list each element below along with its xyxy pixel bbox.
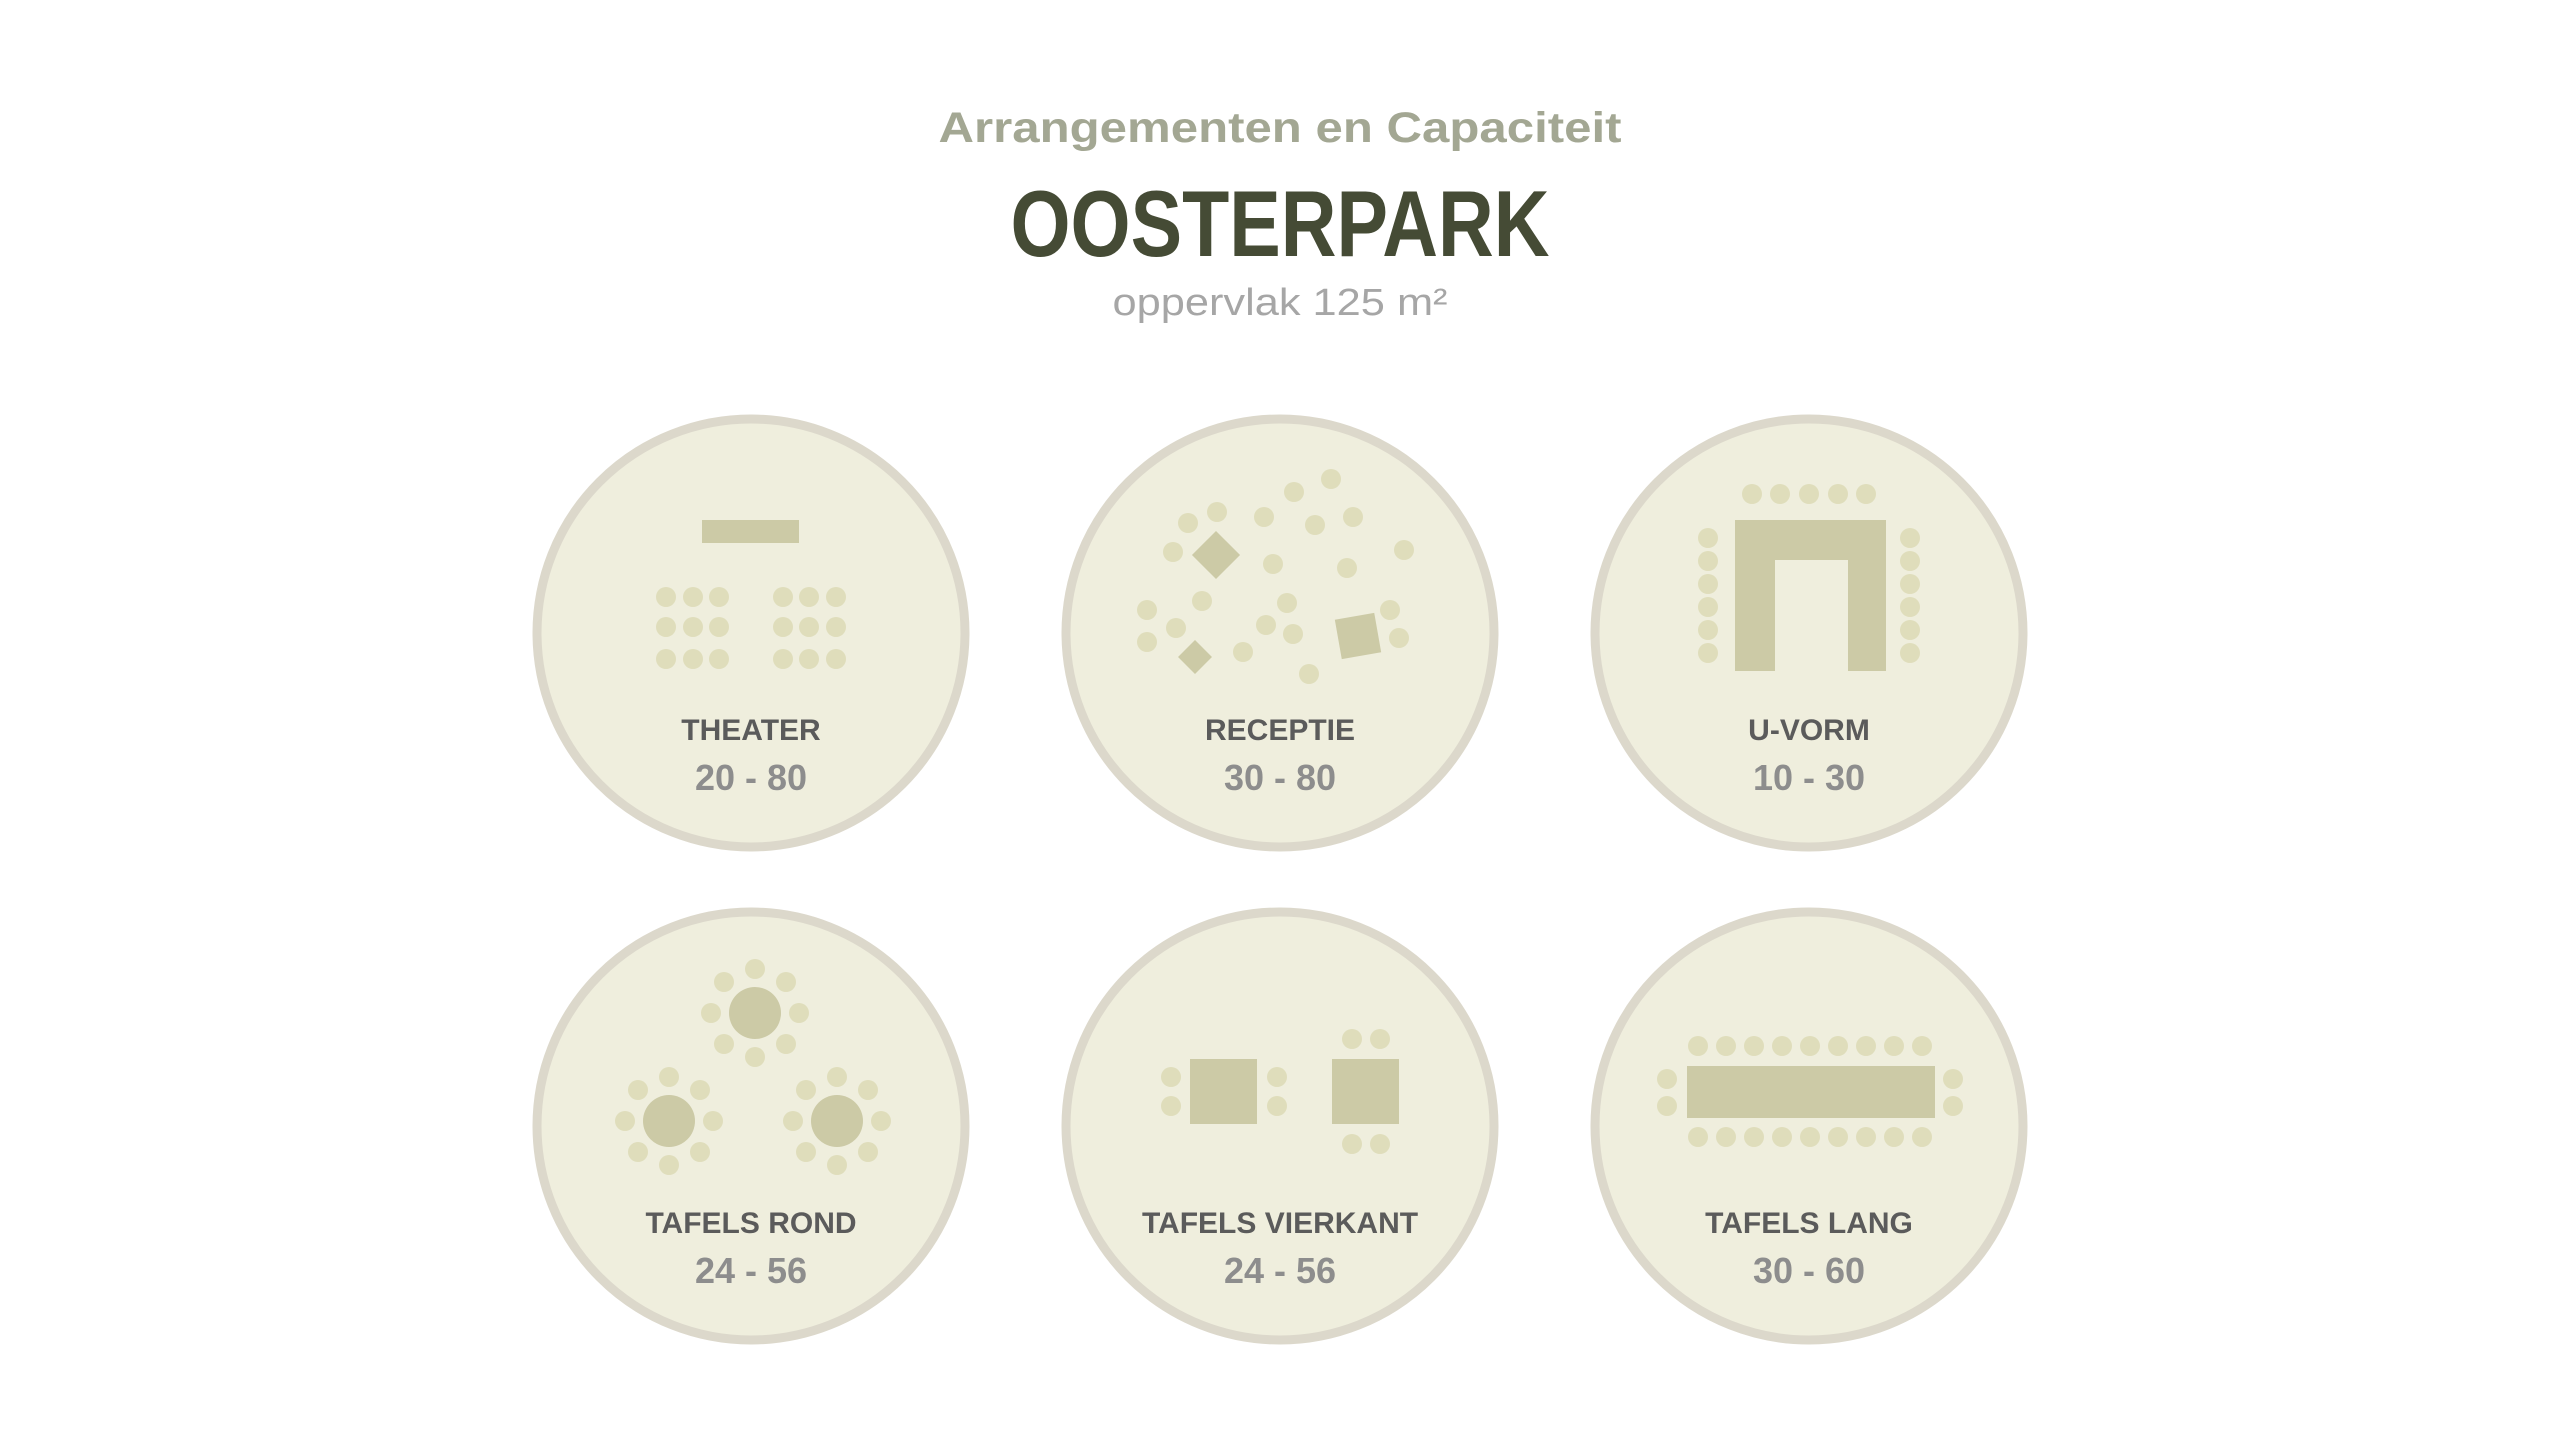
icon: square tables <box>1161 1029 1399 1154</box>
panel: theater <box>537 419 965 847</box>
icon: round tables <box>615 959 891 1175</box>
icon: theater layout <box>656 520 846 669</box>
label: tafels vierkant: TAFELS VIERKANT <box>1142 1207 1418 1240</box>
label: receptie: RECEPTIE <box>1205 714 1355 747</box>
panel: tafels vierkant <box>1066 912 1494 1340</box>
panel: receptie <box>1066 419 1494 847</box>
label: tafels lang: TAFELS LANG <box>1705 1207 1913 1240</box>
capacity: theater: 20 - 80 <box>695 757 807 798</box>
label: theater: THEATER <box>681 714 821 747</box>
capacity: u-vorm: 10 - 30 <box>1753 757 1865 798</box>
panel: tafels rond <box>537 912 965 1340</box>
title: OOSTERPARK <box>1010 171 1550 276</box>
area text: oppervlak 125 m² <box>1112 282 1448 324</box>
icon: receptie layout <box>1137 469 1414 684</box>
subtitle: Arrangementen en Capaciteit <box>938 104 1622 152</box>
panel: u-vorm <box>1595 419 2023 847</box>
capacity: tafels rond: 24 - 56 <box>695 1250 807 1291</box>
capacity: tafels lang: 30 - 60 <box>1753 1250 1865 1291</box>
capacity: receptie: 30 - 80 <box>1224 757 1336 798</box>
icon: u-vorm layout <box>1698 484 1920 671</box>
icon: long table <box>1657 1036 1963 1147</box>
panel: tafels lang <box>1595 912 2023 1340</box>
label: u-vorm: U-VORM <box>1748 714 1870 747</box>
label: tafels rond: TAFELS ROND <box>645 1207 857 1240</box>
capacity: tafels vierkant: 24 - 56 <box>1224 1250 1336 1291</box>
